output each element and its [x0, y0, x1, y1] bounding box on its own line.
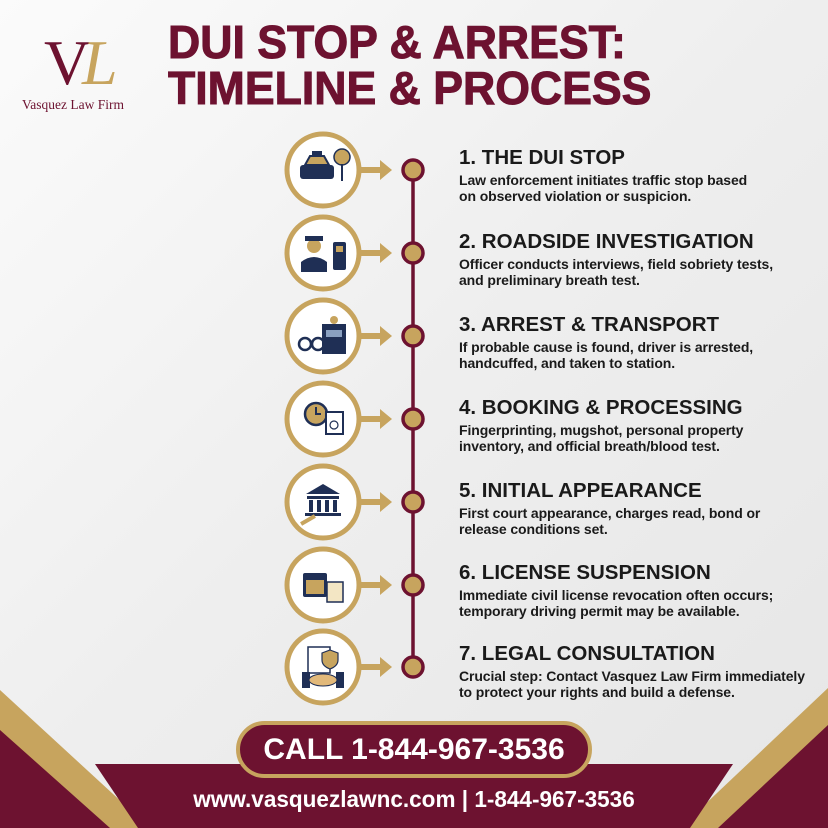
step 5: First court appearance, charges read, bond or — [459, 505, 760, 521]
step 5: 5. INITIAL APPEARANCE — [459, 479, 702, 502]
call button: CALL 1-844-967-3536 — [263, 732, 565, 766]
step 2: and preliminary breath test. — [459, 272, 640, 288]
icon: clock and document — [305, 403, 343, 434]
step 3: If probable cause is found, driver is arrested, — [459, 339, 753, 355]
step 1: on observed violation or suspicion. — [459, 188, 691, 204]
logo — [22, 27, 124, 112]
step 2 — [459, 230, 773, 288]
icon: officer — [301, 236, 346, 272]
step 7 — [459, 642, 805, 700]
footer contact: www.vasquezlawnc.com | 1-844-967-3536 — [193, 786, 635, 812]
logo: Vasquez Law Firm — [22, 97, 124, 112]
step 1: Law enforcement initiates traffic stop based — [459, 172, 747, 188]
step 7: Crucial step: Contact Vasquez Law Firm immediately — [459, 668, 805, 684]
step 3 — [459, 313, 753, 371]
step 5: release conditions set. — [459, 521, 608, 537]
call button — [236, 721, 592, 778]
icon: calendar and document — [303, 573, 343, 602]
step 2: 2. ROADSIDE INVESTIGATION — [459, 230, 754, 253]
title: DUI STOP & ARREST: — [168, 16, 626, 68]
step 4 — [459, 396, 744, 454]
step 7: to protect your rights and build a defense. — [459, 684, 735, 700]
title: TIMELINE & PROCESS — [168, 62, 651, 114]
step 7: 7. LEGAL CONSULTATION — [459, 642, 715, 665]
step 4: Fingerprinting, mugshot, personal property — [459, 422, 743, 438]
step 4: inventory, and official breath/blood test. — [459, 438, 720, 454]
title — [168, 16, 651, 114]
icon: handshake and document — [302, 647, 344, 688]
icon: police car and stop sign — [300, 149, 350, 181]
step 6 — [459, 561, 773, 619]
step 1: 1. THE DUI STOP — [459, 146, 625, 169]
step 3: 3. ARREST & TRANSPORT — [459, 313, 719, 336]
step 1 — [459, 146, 747, 204]
icon: courthouse and gavel — [300, 484, 341, 526]
step 6: temporary driving permit may be available. — [459, 603, 740, 619]
step 2: Officer conducts interviews, field sobriety tests, — [459, 256, 773, 272]
icon: handcuffs and station — [299, 316, 346, 354]
step 3: handcuffed, and taken to station. — [459, 355, 675, 371]
step 6: Immediate civil license revocation often occurs; — [459, 587, 773, 603]
step 4: 4. BOOKING & PROCESSING — [459, 396, 743, 419]
step 6: 6. LICENSE SUSPENSION — [459, 561, 711, 584]
step 5 — [459, 479, 760, 537]
